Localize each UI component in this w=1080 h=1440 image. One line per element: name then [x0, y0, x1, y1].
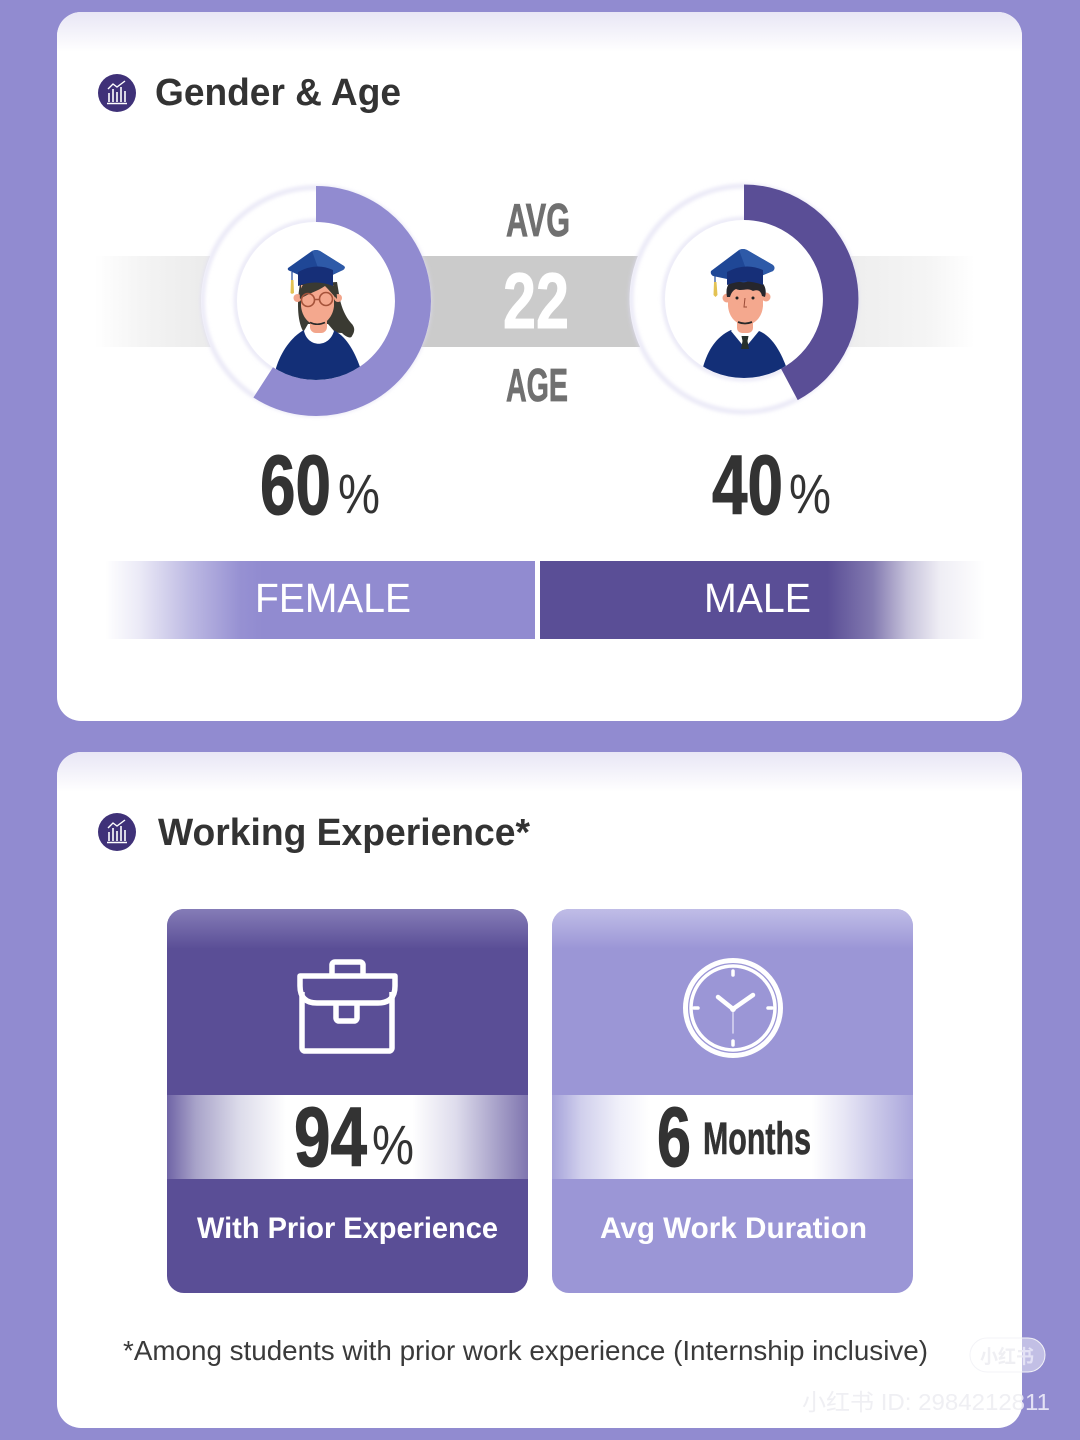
stat band: 94%: % [372, 1113, 414, 1176]
legend bar: male: MALE [704, 575, 811, 621]
card: prior experience [167, 909, 528, 1293]
watermark: 小红书 [980, 1346, 1034, 1368]
heading: Working Experience: Working Experience* [158, 812, 530, 854]
icon: chart badge [98, 74, 136, 112]
card: average work duration [552, 909, 913, 1293]
stat band: 6 months: Months [703, 1113, 811, 1164]
stat: male 40%: % [789, 462, 831, 525]
stat: male 40%: 40 [712, 438, 783, 532]
heading: Gender & Age: Gender & Age [155, 72, 401, 114]
donut chart: male 40% [630, 184, 858, 414]
caption: avg work duration: Avg Work Duration [600, 1212, 867, 1245]
legend bar: male [540, 561, 985, 639]
icon: chart badge [98, 813, 136, 851]
icon: male graduate [703, 249, 787, 385]
watermark [802, 1338, 1050, 1415]
age band [95, 256, 975, 347]
panel: gender and age [57, 12, 1022, 721]
stat: female 60%: % [338, 462, 380, 525]
stat band: 6 months [552, 1090, 913, 1184]
donut chart: female 60% [201, 186, 431, 416]
stat band: 6 months: 6 [657, 1090, 691, 1184]
footnote: *Among students with prior work experience (Internship inclusive) [123, 1335, 928, 1366]
number: average age 22: 22 [503, 256, 569, 345]
icon: briefcase [300, 962, 395, 1051]
icon: female graduate [276, 250, 360, 385]
watermark: 小红书 ID: 2984212811 [802, 1389, 1050, 1415]
label: AGE: AGE [506, 359, 568, 411]
stat band: 94%: 94 [294, 1090, 367, 1184]
legend bar: female [95, 561, 535, 639]
panel: working experience [57, 752, 1022, 1428]
label: AVG: AVG [506, 194, 570, 246]
stat band: 94% [167, 1090, 528, 1184]
legend bar: female: FEMALE [255, 575, 411, 621]
icon: clock [686, 960, 780, 1056]
caption: with prior experience: With Prior Experience [197, 1212, 498, 1245]
stat: female 60%: 60 [260, 438, 331, 532]
